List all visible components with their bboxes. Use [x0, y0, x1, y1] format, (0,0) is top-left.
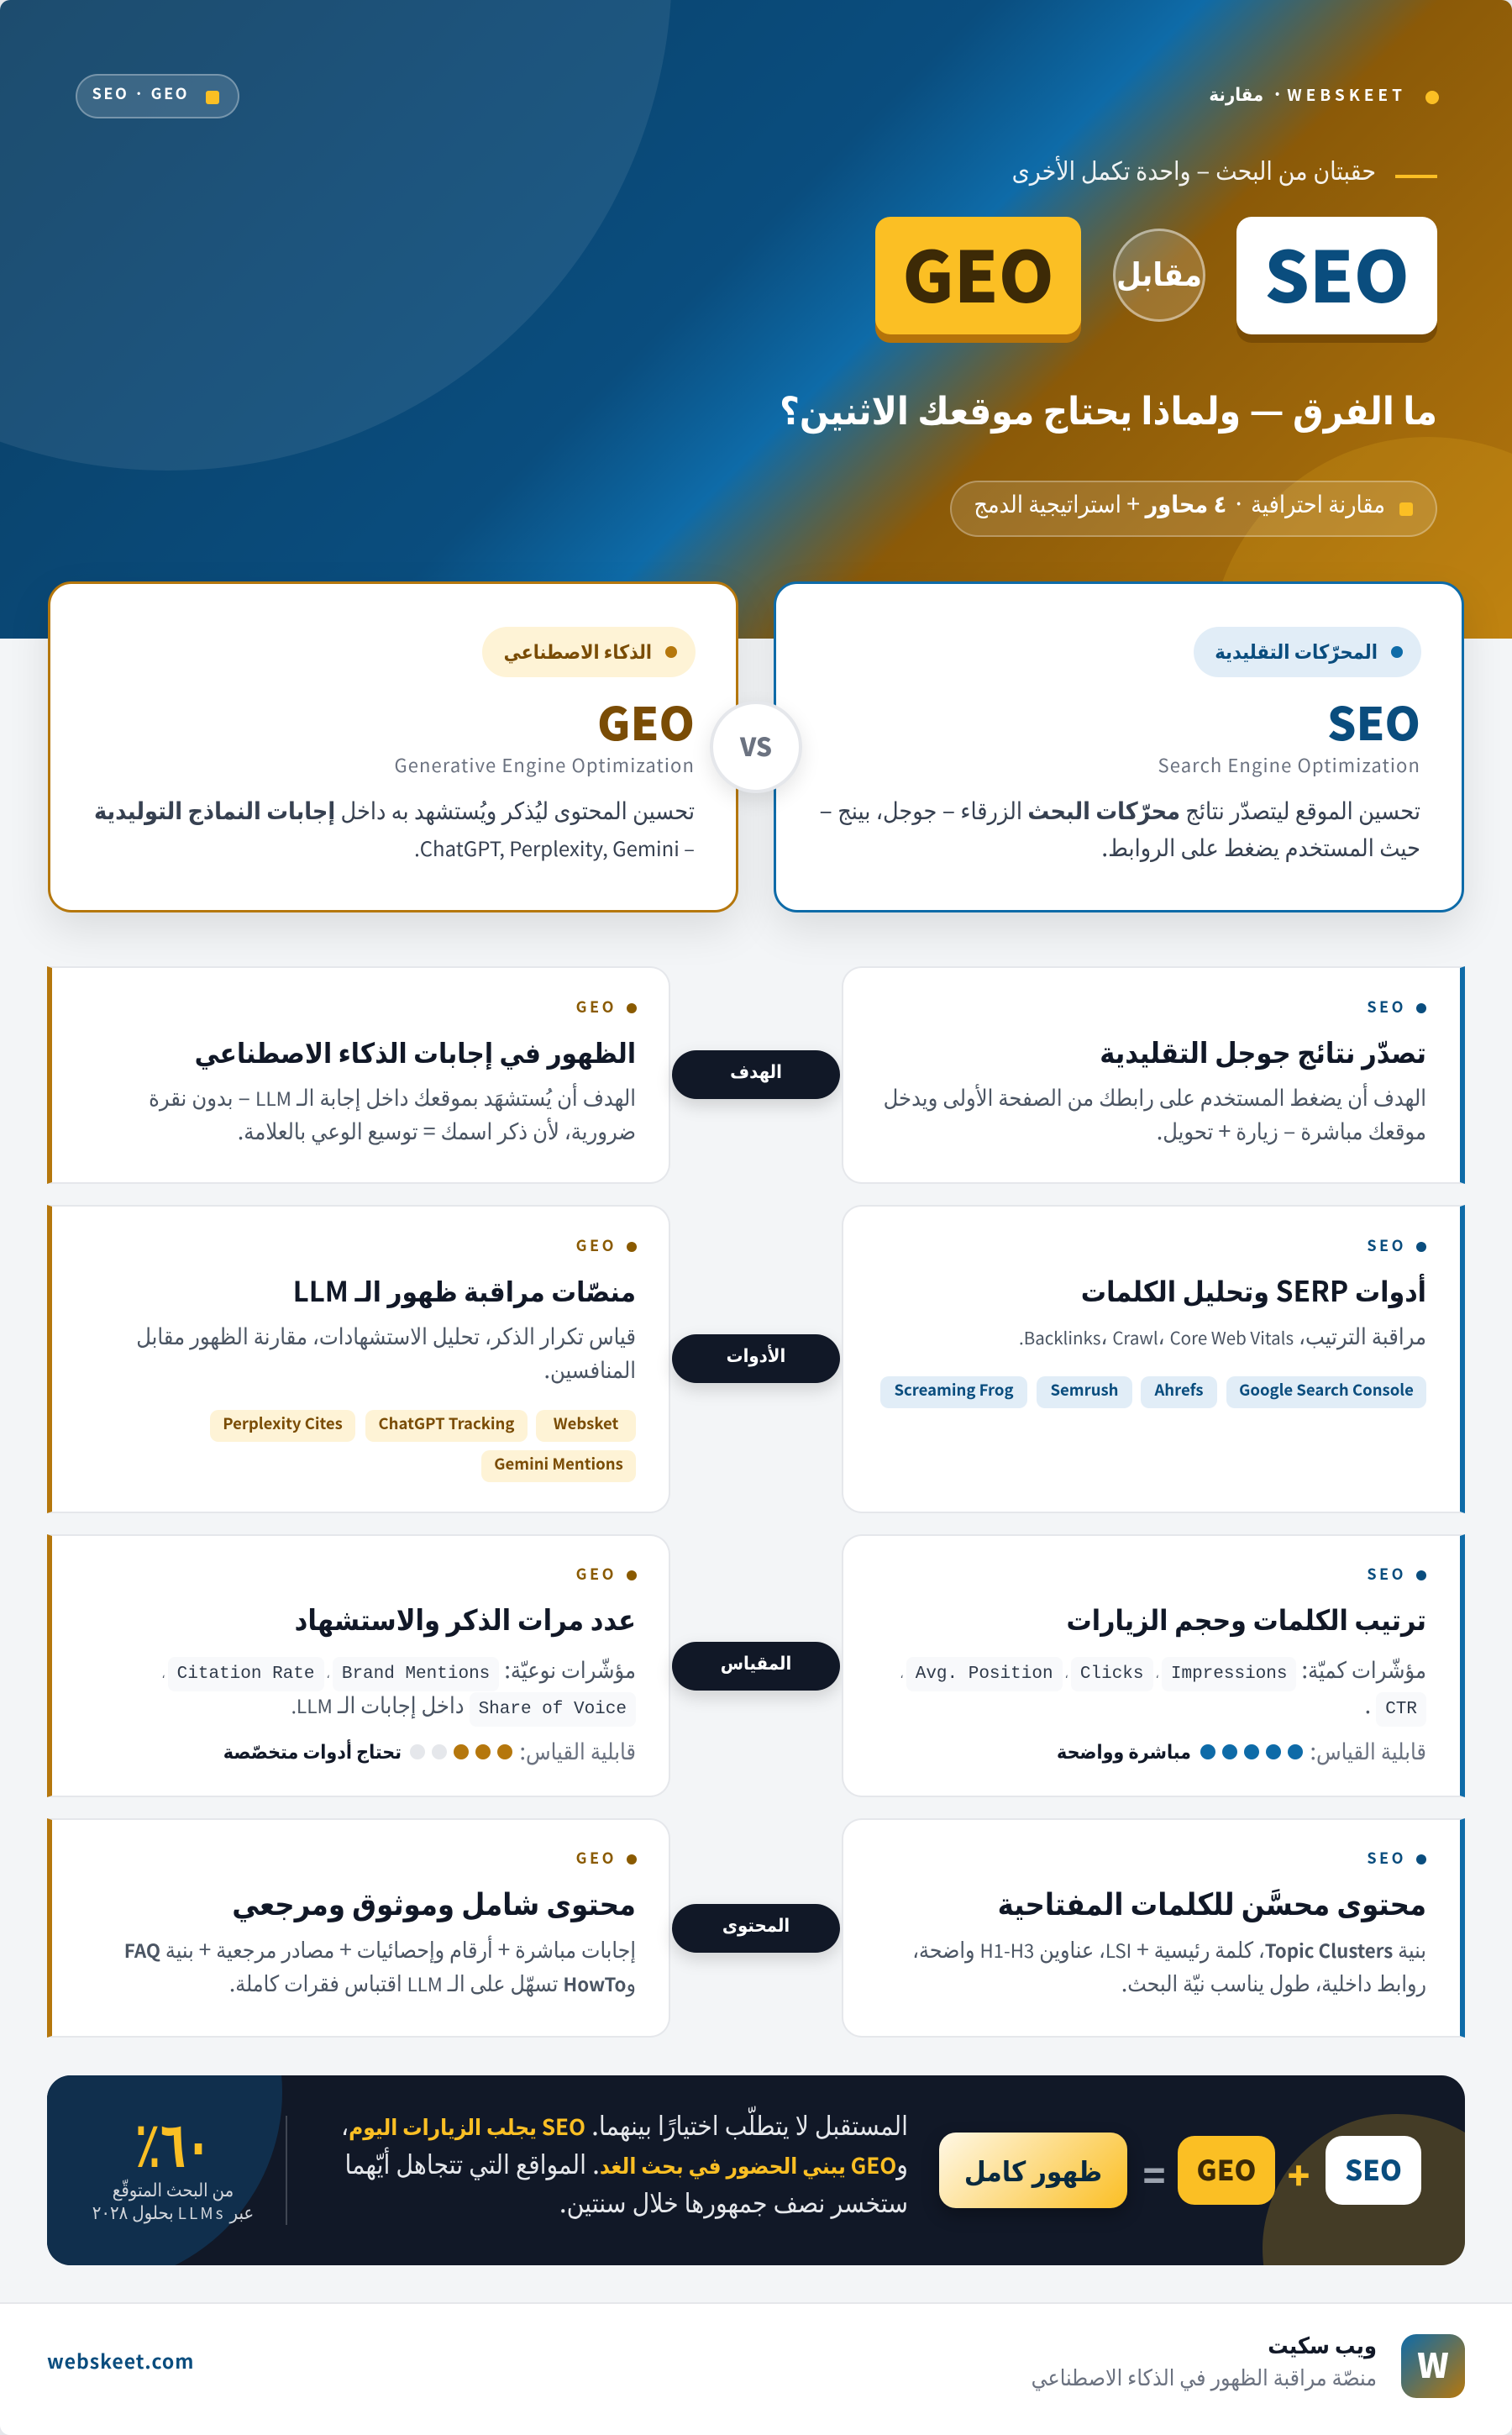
eyebrow line — [1395, 175, 1437, 178]
card eyebrow: GEO — [576, 1234, 617, 1256]
GEO tag — [482, 627, 696, 677]
SEO heading: SEO — [1327, 687, 1420, 754]
card eyebrow: SEO — [1367, 1234, 1406, 1256]
axis pill: tools: الأدوات — [727, 1341, 785, 1368]
card text: المنافسين. — [543, 1352, 636, 1385]
SEO tag dot — [1391, 646, 1403, 658]
VS circle — [710, 701, 802, 793]
card text — [161, 1652, 636, 1720]
SEO chip — [1326, 2136, 1421, 2205]
SEO metric card — [842, 1534, 1465, 1797]
top left pill — [76, 74, 239, 118]
card text: CTR . — [1365, 1687, 1417, 1720]
measurability dots — [410, 1744, 512, 1759]
bottom banner — [47, 2075, 1465, 2265]
equals sign: = — [1143, 2147, 1165, 2201]
card title: محتوى محسَّن للكلمات المفتاحية — [998, 1880, 1426, 1924]
measurability dots — [1200, 1744, 1303, 1759]
card eyebrow: SEO — [1367, 1847, 1406, 1869]
header band — [0, 0, 1512, 639]
banner text — [341, 2105, 908, 2221]
axis pill: content: المحتوى — [722, 1911, 790, 1938]
measurability verdict: مباشرة وواضحة — [1057, 1736, 1191, 1764]
footer logo — [1401, 2334, 1465, 2398]
card text: مراقبة الترتيب، Backlinks، Crawl، Core Web Vitals. — [1019, 1318, 1426, 1351]
badge: SEO: SEO — [1264, 222, 1410, 323]
footer brand name: ويب سكيت — [1268, 2327, 1377, 2360]
hero card: SEO — [774, 581, 1464, 912]
result chip — [939, 2133, 1127, 2208]
GEO tag dot — [665, 646, 677, 658]
measurability label: قابلية القياس: — [1310, 1733, 1426, 1766]
row 2: tools — [47, 1205, 1465, 1513]
banner text: وGEO يبني الحضور في بحث الغد. المواقع التي تتجاهل أيّهما — [345, 2143, 908, 2182]
axis pill: tools — [672, 1334, 840, 1383]
card title: ترتيب الكلمات وحجم الزيارات — [1067, 1597, 1426, 1638]
chip — [210, 1410, 355, 1442]
SEO content card — [842, 1818, 1465, 2038]
chip: Semrush — [1050, 1379, 1118, 1401]
card title: أدوات SERP وتحليل الكلمات — [1081, 1269, 1426, 1310]
card dot — [627, 1003, 637, 1013]
card text: موقعك مباشرة – زيارة + تحويل. — [1157, 1113, 1426, 1146]
chip — [1037, 1376, 1132, 1408]
card dot — [627, 1242, 637, 1252]
card eyebrow: GEO — [576, 1563, 617, 1585]
axis pill: content — [672, 1904, 840, 1953]
subtitle text: مقارنة احترافية · ٤ محاور + استراتيجية الدمج — [974, 486, 1385, 520]
card title: عدد مرات الذكر والاستشهاد — [295, 1597, 636, 1638]
GEO heading: GEO — [597, 687, 695, 754]
GEO description — [94, 792, 695, 862]
footer url: webskeet.com — [47, 2346, 194, 2375]
card text: إجابات مباشرة + أرقام وإحصائيات + مصادر مرجعية + بنية FAQ — [124, 1932, 636, 1964]
card text: ضرورية، لأن ذكر اسمك = توسيع الوعي بالعلامة. — [238, 1113, 636, 1146]
decorative circle bottom right — [1210, 437, 1512, 874]
GEO description: تحسين المحتوى ليُذكر ويُستشهد به داخل إجابات النماذج التوليدية — [94, 792, 695, 827]
axis pill: goal: الهدف — [730, 1057, 782, 1084]
result chip: ظهور كامل — [964, 2149, 1102, 2190]
subtitle square dot — [1399, 502, 1413, 516]
chip — [536, 1410, 636, 1442]
SEO chip: SEO — [1345, 2148, 1402, 2189]
GEO content card — [47, 1818, 670, 2038]
SEO description: حيث المستخدم يضغط على الروابط. — [1101, 829, 1420, 864]
card text: بنية Topic Clusters، كلمة رئيسية + LSI، عناوين H1-H3 واضحة، — [912, 1932, 1426, 1964]
banner text: المستقبل لا يتطلّب اختيارًا بينهما. SEO يجلب الزيارات اليوم، — [341, 2105, 908, 2143]
decorative circle top left — [0, 0, 672, 471]
measurability label: قابلية القياس: — [519, 1733, 636, 1766]
chip — [1141, 1376, 1217, 1408]
card text: مؤشّرات نوعيّة: Brand Mentions ، Citation Rate ، — [161, 1652, 636, 1685]
card title: منصّات مراقبة ظهور الـ LLM — [293, 1270, 636, 1310]
card text: قياس تكرار الذكر، تحليل الاستشهادات، مقارنة الظهور مقابل — [136, 1318, 636, 1351]
GEO description: – ChatGPT, Perplexity, Gemini. — [414, 833, 695, 862]
card text: روابط داخلية، طول يناسب نيّة البحث. — [1121, 1965, 1426, 1998]
GEO expansion: Generative Engine Optimization — [394, 751, 695, 778]
card dot — [1416, 1242, 1426, 1252]
chip: Screaming Frog — [894, 1379, 1013, 1401]
card text — [900, 1652, 1426, 1720]
chip: Gemini Mentions — [494, 1453, 623, 1475]
card text — [136, 1318, 636, 1385]
brand dot — [1425, 91, 1439, 104]
eyebrow text: حقبتان من البحث – واحدة تكمل الأخرى — [1012, 150, 1376, 187]
card title: تصدّر نتائج جوجل التقليدية — [1100, 1030, 1426, 1071]
SEO tag — [1194, 627, 1421, 677]
SEO tag label: المحرّكات التقليدية — [1215, 636, 1378, 665]
SEO description — [820, 792, 1420, 864]
stat number: ٦٠٪ — [135, 2093, 211, 2185]
stat label — [92, 2175, 254, 2225]
SEO goal card — [842, 966, 1465, 1184]
chip — [880, 1376, 1027, 1408]
badge: versus — [1113, 229, 1205, 322]
card title: محتوى شامل وموثوق ومرجعي — [232, 1880, 636, 1924]
chip — [481, 1450, 636, 1482]
GEO tag label: الذكاء الاصطناعي — [504, 636, 652, 665]
badge: versus: مقابل — [1116, 249, 1202, 295]
card text: الهدف أن يضغط المستخدم على رابطك من الصفحة الأولى ويدخل — [884, 1080, 1426, 1112]
card text: Share of Voice داخل إجابات الـ LLM. — [291, 1687, 627, 1720]
row 1: goal — [47, 966, 1465, 1184]
measurability verdict: تحتاج أدوات متخصّصة — [223, 1736, 402, 1764]
SEO tools card — [842, 1205, 1465, 1513]
chip: Ahrefs — [1154, 1379, 1204, 1401]
brand text: WEBSKEET · مقارنة — [1209, 80, 1406, 107]
axis pill: metric: المقياس — [721, 1649, 791, 1675]
card eyebrow: SEO — [1367, 996, 1406, 1018]
pill square dot — [206, 91, 219, 104]
card text: الهدف أن يُستشهَد بموقعك داخل إجابة الـ LLM – بدون نقرة — [149, 1080, 636, 1112]
banner divider — [286, 2116, 287, 2225]
chip: Websket — [554, 1412, 618, 1434]
footer — [0, 2302, 1512, 2435]
SEO expansion: Search Engine Optimization — [1158, 751, 1420, 778]
card eyebrow: SEO — [1367, 1563, 1406, 1585]
GEO chip — [1178, 2136, 1275, 2205]
card dot — [627, 1570, 637, 1580]
hero card: GEO — [48, 581, 738, 912]
footer tagline: منصّة مراقبة الظهور في الذكاء الاصطناعي — [1032, 2359, 1377, 2392]
card dot — [1416, 1854, 1426, 1864]
eyebrow — [1012, 150, 1437, 187]
VS circle: VS — [740, 727, 772, 764]
pill label: SEO · GEO — [92, 82, 189, 104]
badge: GEO — [875, 217, 1081, 334]
card eyebrow: GEO — [576, 996, 617, 1018]
row 3: metric — [47, 1534, 1465, 1797]
stat label: عبر LLMs بحلول ٢٠٢٨ — [92, 2198, 254, 2225]
plus sign: + — [1288, 2147, 1310, 2201]
card dot — [1416, 1570, 1426, 1580]
stat label: من البحث المتوقّع — [113, 2175, 234, 2202]
GEO metric card — [47, 1534, 670, 1797]
subtitle pill — [950, 481, 1437, 537]
chip — [365, 1410, 528, 1442]
card text — [912, 1932, 1426, 1998]
card title: الظهور في إجابات الذكاء الاصطناعي — [195, 1031, 636, 1071]
banner circle left — [0, 1899, 282, 2285]
GEO chip: GEO — [1197, 2148, 1256, 2189]
GEO goal card — [47, 966, 670, 1184]
chip — [1226, 1376, 1426, 1408]
GEO tools card — [47, 1205, 670, 1513]
card dot — [1416, 1003, 1426, 1013]
card eyebrow: GEO — [576, 1847, 617, 1869]
chip: Google Search Console — [1239, 1379, 1414, 1401]
main title: ما الفرق — ولماذا يحتاج موقعك الاثنين؟ — [780, 381, 1437, 436]
chip: ChatGPT Tracking — [379, 1412, 514, 1434]
axis pill: metric — [672, 1642, 840, 1691]
badge: GEO: GEO — [902, 222, 1054, 323]
badge: SEO — [1236, 217, 1437, 334]
banner text: ستخسر نصف جمهورها خلال سنتين. — [559, 2182, 908, 2221]
card dot — [627, 1854, 637, 1864]
footer logo: W — [1417, 2339, 1449, 2388]
card text — [149, 1080, 636, 1146]
card text — [124, 1932, 636, 1998]
chip: Perplexity Cites — [223, 1412, 343, 1434]
SEO description: تحسين الموقع ليتصدّر نتائج محرّكات البحث الزرقاء – جوجل، بينج – — [820, 792, 1420, 827]
card text — [884, 1080, 1426, 1146]
brand line — [1209, 80, 1439, 107]
axis pill: goal — [672, 1050, 840, 1099]
banner circle right — [1263, 2114, 1512, 2383]
card text: وHowTo تسهّل على الـ LLM اقتباس فقرات كاملة. — [229, 1965, 636, 1998]
row 4: content — [47, 1818, 1465, 2038]
card text: مؤشّرات كميّة: Impressions ، Clicks ، Avg. Position ، — [900, 1652, 1426, 1685]
